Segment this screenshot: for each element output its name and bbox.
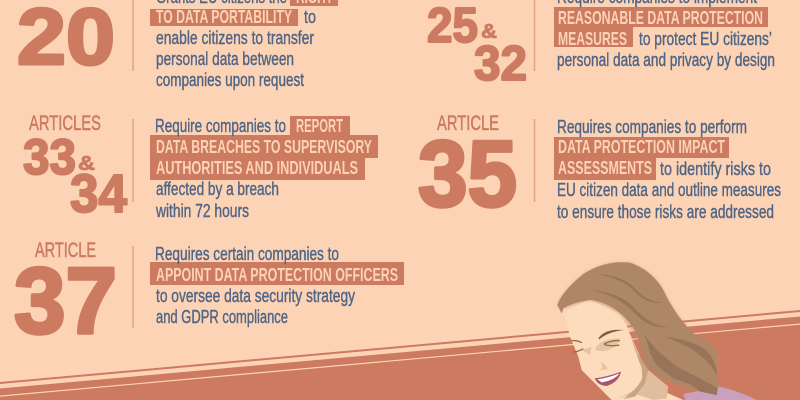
hair bbox=[557, 262, 718, 395]
description: data protection officers: and GDPR compliance bbox=[156, 307, 288, 327]
face bbox=[564, 302, 683, 400]
description: data protection officers: Requires certain companies to bbox=[155, 244, 339, 264]
description: impact assessments: DATA PROTECTION IMPACT bbox=[558, 137, 725, 157]
numbers 25 and 32: 32 bbox=[474, 37, 527, 91]
description: impact assessments: ASSESSMENTS bbox=[558, 158, 652, 178]
lips and smile bbox=[595, 372, 621, 386]
description: data portability: enable citizens to transfer bbox=[156, 28, 314, 48]
bottom diagonal stripes bbox=[0, 310, 800, 400]
numbers 25 and 32 bbox=[427, 0, 527, 91]
eye shadow bbox=[582, 338, 620, 355]
description: reasonable data protection bbox=[554, 0, 775, 70]
description: data portability: companies upon request bbox=[156, 70, 304, 90]
description: data protection officers bbox=[150, 244, 404, 327]
numbers 25 and 32: & bbox=[481, 21, 497, 43]
eyebrow bbox=[598, 330, 624, 339]
description: report data breaches: REPORT bbox=[296, 116, 343, 136]
label ARTICLES: ARTICLES bbox=[29, 112, 101, 135]
label ARTICLE: ARTICLE bbox=[35, 239, 96, 262]
description: data portability: personal data between bbox=[156, 49, 294, 69]
description: data protection officers: to oversee data security strategy bbox=[156, 286, 355, 306]
numbers 33 and 34: 34 bbox=[70, 164, 127, 224]
description: report data breaches: DATA BREACHES TO SUPERVISORY bbox=[156, 137, 372, 157]
description: data portability bbox=[150, 0, 338, 90]
numbers 33 and 34: 33 bbox=[23, 129, 76, 185]
number 37: 37 bbox=[14, 248, 117, 353]
description: reasonable data protection: MEASURES bbox=[558, 29, 627, 49]
description: data portability: TO DATA PORTABILITY bbox=[156, 7, 292, 27]
label ARTICLE: ARTICLE bbox=[437, 112, 499, 135]
description: report data breaches: AUTHORITIES AND INDIVIDUALS bbox=[156, 158, 358, 178]
panel: articles 33 and 34 bbox=[23, 112, 378, 224]
panel: articles 25 and 32 bbox=[427, 0, 775, 91]
eyes bbox=[572, 341, 620, 352]
panel: article 35 bbox=[418, 112, 781, 226]
description: impact assessments bbox=[554, 117, 781, 222]
description: report data breaches: Require companies to bbox=[155, 116, 286, 136]
number 35: 35 bbox=[418, 121, 517, 226]
description: data portability: to bbox=[304, 7, 316, 27]
description: impact assessments: to identify risks to bbox=[660, 159, 771, 179]
shirt bbox=[683, 387, 757, 400]
numbers 33 and 34: & bbox=[78, 153, 95, 175]
panel: article 37 bbox=[14, 239, 404, 353]
hair strands bbox=[592, 274, 718, 395]
illustration: smiling woman bbox=[557, 262, 757, 400]
numbers 33 and 34 bbox=[23, 129, 127, 224]
description: report data breaches bbox=[150, 116, 378, 221]
description: report data breaches: affected by a breach bbox=[156, 179, 279, 199]
description: report data breaches: within 72 hours bbox=[155, 201, 249, 221]
neck shadow bbox=[615, 327, 668, 400]
description: data protection officers: APPOINT DATA PROTECTION OFFICERS bbox=[156, 265, 398, 285]
panel: article 20 bbox=[17, 0, 338, 90]
nose bbox=[598, 362, 607, 371]
numbers 25 and 32: 25 bbox=[427, 0, 478, 53]
